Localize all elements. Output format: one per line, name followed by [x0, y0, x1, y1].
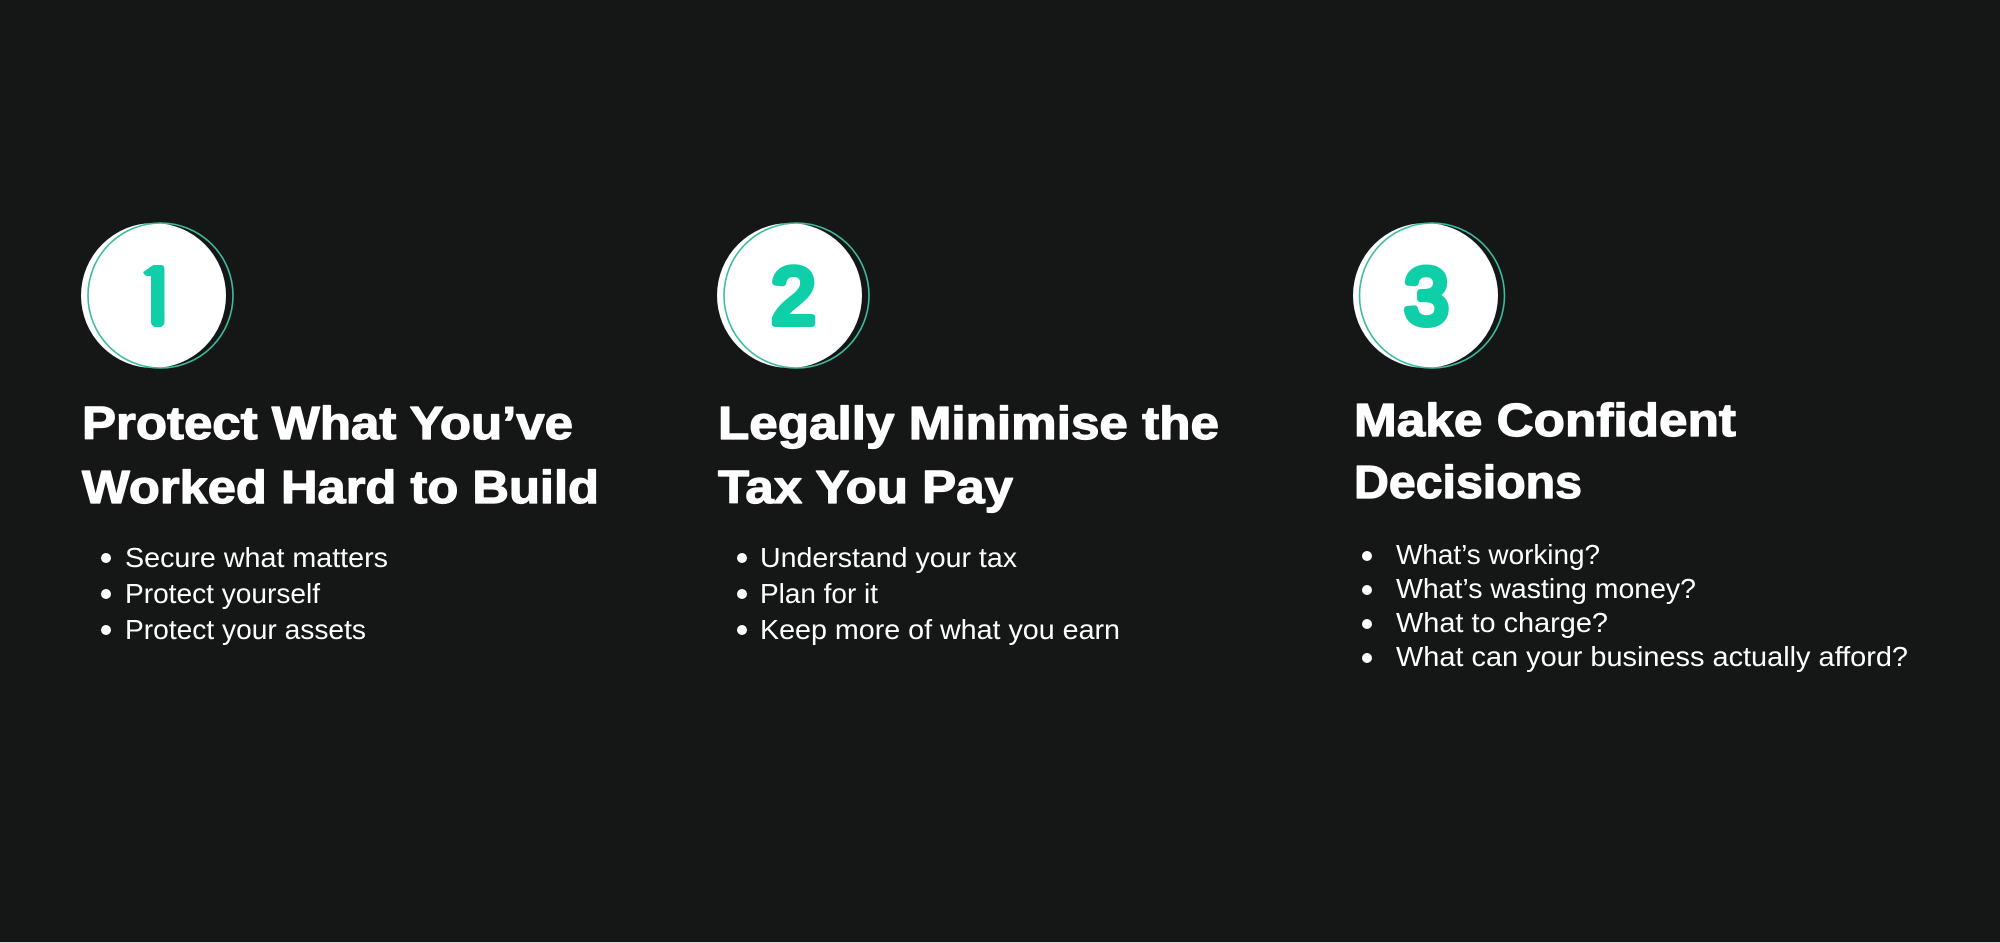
heading: decisions: Decisions — [1354, 456, 1582, 508]
list: tax bullets: Plan for it — [760, 578, 878, 609]
icon: number 3 badge: 3 — [1404, 252, 1449, 340]
heading: protect — [82, 397, 599, 513]
list: protect bullets: Protect yourself — [125, 578, 320, 609]
icon: number 2 badge: 2 — [771, 252, 816, 340]
list: decisions bullets: What can your business actually afford? — [1396, 641, 1908, 672]
heading: protect: Worked Hard to Build — [82, 461, 599, 513]
panel: make confident decisions — [1353, 223, 1908, 672]
list: protect bullets: Secure what matters — [125, 542, 388, 573]
list: tax bullets: Keep more of what you earn — [760, 614, 1120, 645]
heading: decisions — [1354, 394, 1736, 508]
heading: protect: Protect What You’ve — [82, 397, 573, 449]
panel: protect what you've worked hard to build — [81, 223, 599, 645]
list: decisions bullets — [1362, 539, 1908, 672]
icon: number 1 badge: 1 — [134, 252, 178, 340]
list: decisions bullets: What’s working? — [1396, 539, 1600, 570]
heading: tax: Legally Minimise the — [718, 397, 1219, 449]
list: decisions bullets: What to charge? — [1396, 607, 1608, 638]
list: decisions bullets: What’s wasting money? — [1396, 573, 1696, 604]
heading: decisions: Make Confident — [1354, 394, 1736, 446]
icon: number 3 badge — [1353, 223, 1504, 368]
list: protect bullets: Protect your assets — [125, 614, 366, 645]
list: protect bullets — [101, 542, 388, 645]
icon: number 1 badge — [81, 223, 233, 368]
panel: legally minimise the tax you pay — [717, 223, 1219, 645]
list: tax bullets: Understand your tax — [760, 542, 1017, 573]
list: tax bullets — [737, 542, 1120, 645]
heading: tax — [718, 397, 1219, 513]
heading: tax: Tax You Pay — [718, 461, 1013, 513]
icon: number 2 badge — [717, 223, 869, 368]
